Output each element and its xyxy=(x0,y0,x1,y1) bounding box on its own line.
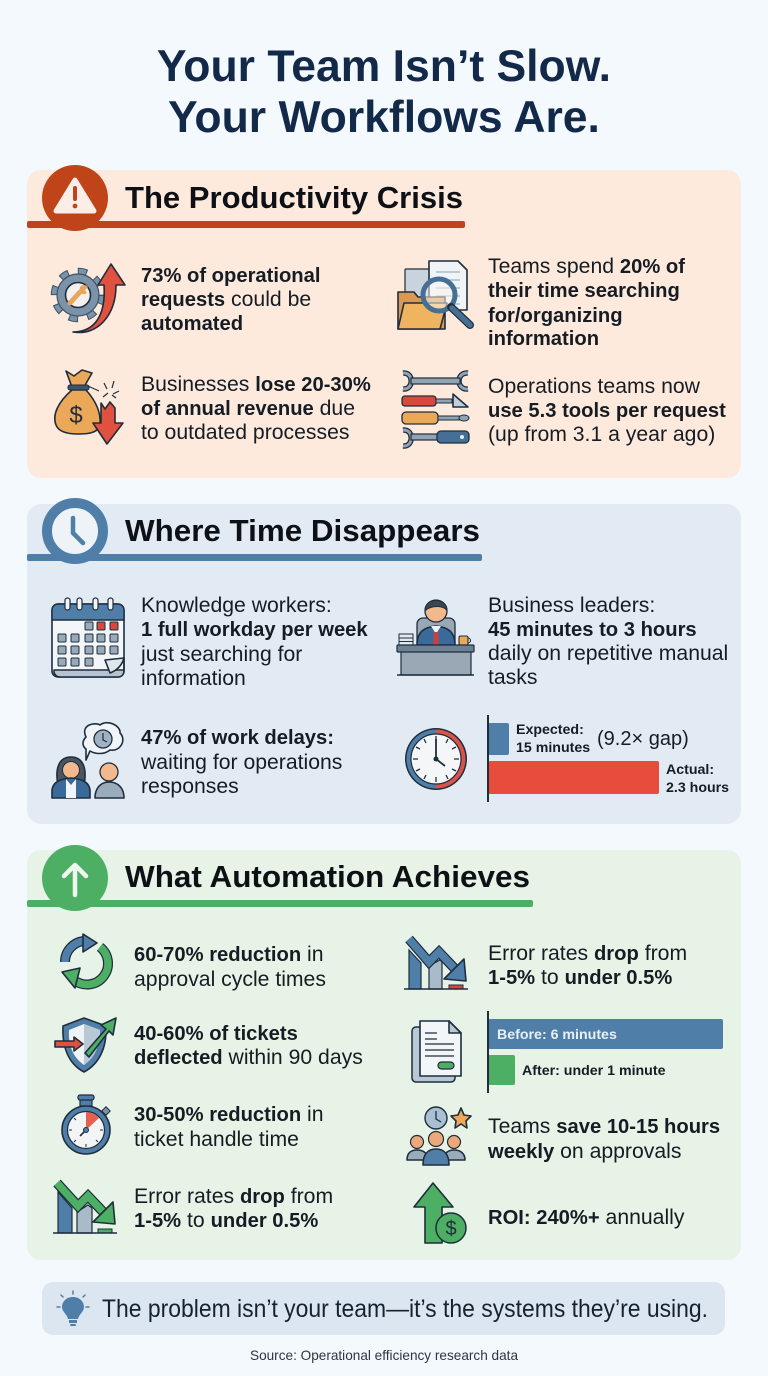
icon: wall clock xyxy=(405,728,467,790)
bar chart: expected vs actual: Expected: xyxy=(516,722,584,738)
text: (up from 3.1 a year ago) xyxy=(488,423,715,446)
section header: where time disappears xyxy=(27,503,482,561)
text: information xyxy=(488,328,599,350)
text: The problem isn’t your team—it’s the systems they’re using. xyxy=(102,1295,708,1323)
stat: lose 20-30% revenue xyxy=(55,370,371,444)
section header: the productivity crisis xyxy=(27,165,465,231)
stat: 47% of work delays xyxy=(52,723,342,798)
text: Knowledge workers: xyxy=(141,594,332,617)
title: Your Workflows Are. xyxy=(168,93,600,142)
text: tasks xyxy=(488,666,537,689)
text: their time searching xyxy=(488,280,680,302)
text: weekly on approvals xyxy=(488,1140,681,1163)
icon: team with clock and star xyxy=(407,1107,471,1165)
text: Business leaders: xyxy=(488,594,655,617)
source note: Source: Operational efficiency research data xyxy=(250,1348,518,1363)
icon: falling chart, green arrow xyxy=(53,1183,117,1233)
text: Teams save 10-15 hours xyxy=(488,1115,720,1138)
heading: The Productivity Crisis xyxy=(125,180,463,215)
bar chart: expected vs actual: 15 minutes xyxy=(516,740,590,756)
title: Your Team Isn’t Slow. xyxy=(157,42,611,91)
stat: 5.3 tools per request xyxy=(402,373,726,446)
text: to outdated processes xyxy=(141,421,349,444)
text: for/organizing xyxy=(488,305,623,327)
text: requests could be xyxy=(141,288,311,311)
text: approval cycle times xyxy=(134,968,326,991)
text: 30-50% reduction in xyxy=(134,1103,324,1126)
panel background xyxy=(27,170,741,478)
text: Teams spend 20% of xyxy=(488,255,685,278)
section header: what automation achieves xyxy=(27,845,533,911)
icon: up arrow with dollar coin: $ xyxy=(445,1218,457,1240)
panel: where time disappears xyxy=(27,503,741,824)
text: responses xyxy=(141,775,239,798)
stat: save 10-15 hours xyxy=(407,1107,720,1165)
stat: 20% time searching xyxy=(398,255,685,350)
stat: 30-50% reduction xyxy=(62,1095,324,1154)
icon: warning badge xyxy=(27,165,465,231)
text: 40-60% of tickets xyxy=(134,1023,298,1045)
callout: closing statement xyxy=(42,1282,725,1335)
stat: 40-60% deflected xyxy=(55,1018,363,1072)
text: 60-70% reduction in xyxy=(134,943,324,966)
text: 45 minutes to 3 hours xyxy=(488,619,697,641)
text: Error rates drop from xyxy=(488,942,687,965)
icon: documents xyxy=(412,1021,461,1082)
heading: What Automation Achieves xyxy=(125,859,530,894)
bar chart: expected vs actual: (9.2× gap) xyxy=(597,728,689,750)
stat: before and after time xyxy=(412,1011,723,1093)
stat: error rates drop (left) xyxy=(53,1183,333,1233)
text: of annual revenue due xyxy=(141,397,355,420)
bar chart: before vs after xyxy=(487,1011,723,1093)
icon: business leader at desk xyxy=(397,600,474,675)
bar chart: before vs after: After: under 1 minute xyxy=(522,1063,666,1079)
stat: 73% automatable xyxy=(55,264,320,335)
stat: 60-70% reduction xyxy=(62,934,326,991)
icon: people with thought bubble clock xyxy=(52,723,124,798)
icon: clock badge xyxy=(27,503,482,561)
icon: calendar xyxy=(52,598,124,677)
stat: 1 full workday per week xyxy=(52,594,368,690)
text: automated xyxy=(141,313,243,335)
stat: ROI 240%+ xyxy=(414,1183,685,1243)
icon: falling chart, blue arrow xyxy=(404,939,468,989)
icon: money bag with falling arrow: $ xyxy=(69,402,83,429)
icon: up arrow badge xyxy=(27,845,533,911)
text: deflected within 90 days xyxy=(134,1046,363,1069)
icon: stopwatch xyxy=(62,1095,110,1154)
panel: what automation achieves xyxy=(27,845,741,1260)
text: Businesses lose 20-30% xyxy=(141,373,371,396)
icon: assorted tools xyxy=(402,373,469,446)
stat: 45 minutes to 3 hours xyxy=(397,594,728,689)
icon: up arrow with dollar coin xyxy=(414,1183,466,1243)
text: ROI: 240%+ annually xyxy=(488,1206,685,1229)
text: 1 full workday per week xyxy=(141,619,368,641)
bar chart: expected vs actual xyxy=(487,715,729,802)
icon: folder, documents and magnifier xyxy=(398,261,470,329)
bar chart: before vs after: Before: 6 minutes xyxy=(497,1027,617,1043)
text: Error rates drop from xyxy=(134,1185,333,1208)
text: information xyxy=(141,667,246,690)
icon: cycle arrows xyxy=(62,934,108,988)
stat: error rates drop (right) xyxy=(404,939,687,989)
stat: expected vs actual gap xyxy=(405,715,729,802)
heading: Where Time Disappears xyxy=(125,513,480,548)
icon: gear with wrench and up arrow xyxy=(55,264,125,332)
panel: the productivity crisis xyxy=(27,165,741,478)
text: use 5.3 tools per request xyxy=(488,400,726,422)
bar chart: expected vs actual: 2.3 hours xyxy=(666,780,729,796)
text: 1-5% to under 0.5% xyxy=(134,1209,318,1232)
panel background xyxy=(27,504,741,824)
icon: money bag with falling arrow xyxy=(55,370,123,444)
callout background xyxy=(42,1282,725,1335)
text: Operations teams now xyxy=(488,375,701,398)
text: daily on repetitive manual xyxy=(488,642,728,665)
icon: lightbulb xyxy=(57,1291,89,1326)
text: just searching for xyxy=(140,643,302,666)
text: waiting for operations xyxy=(140,751,342,774)
text: ticket handle time xyxy=(134,1128,299,1151)
text: 1-5% to under 0.5% xyxy=(488,966,672,989)
text: 73% of operational xyxy=(141,265,320,287)
icon: shield with arrows xyxy=(55,1018,116,1072)
panel background xyxy=(27,850,741,1260)
bar chart: expected vs actual: Actual: xyxy=(666,762,714,778)
text: 47% of work delays: xyxy=(141,727,334,749)
